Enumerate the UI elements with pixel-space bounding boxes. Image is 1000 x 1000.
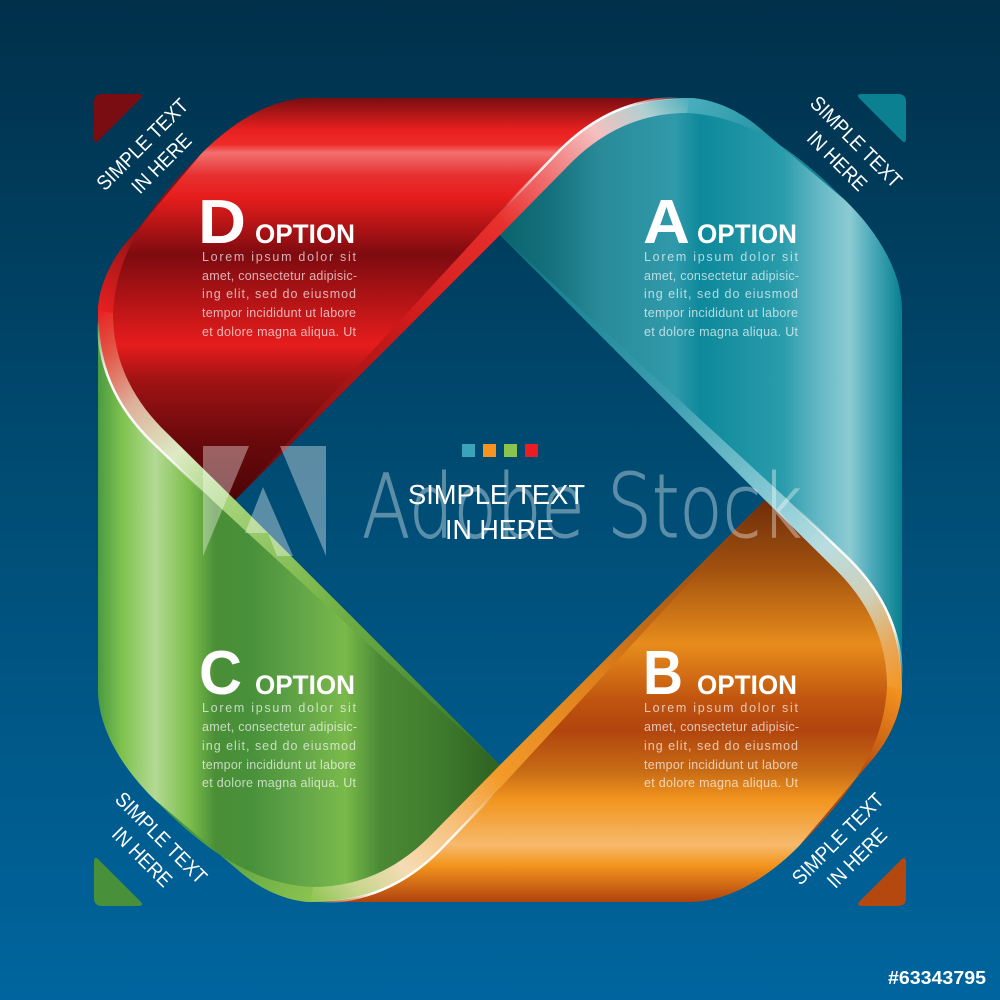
watermark: logo (203, 446, 326, 556)
ribbon: option C green (98, 310, 500, 902)
corner icon: orange triangle (858, 858, 906, 906)
text block: option C: OPTION (255, 670, 355, 700)
text block: option D (198, 188, 357, 339)
text block: option B: ing elit, sed do eiusmod (644, 739, 798, 753)
corner icon: teal triangle (858, 94, 906, 142)
text block: option C: ing elit, sed do eiusmod (202, 739, 356, 753)
text block: option A: A (643, 188, 690, 257)
ribbon: option A teal (500, 98, 902, 690)
outer edge highlights (98, 98, 902, 902)
corner label: top left: IN HERE (127, 129, 196, 198)
glass fold band: green over red (98, 310, 500, 765)
glass fold band: teal over orange (500, 235, 902, 690)
text block: option A: Lorem ipsum dolor sit (644, 250, 799, 264)
corner icon: green triangle (94, 858, 142, 906)
text block: option B: tempor incididunt ut labore (644, 758, 798, 772)
text block: option C: et dolore magna aliqua. Ut (202, 776, 357, 790)
glass fold band: orange over green (310, 500, 765, 902)
text block: option D: D (198, 188, 246, 257)
text block: option D: ing elit, sed do eiusmod (202, 287, 356, 301)
text block: option A: ing elit, sed do eiusmod (644, 287, 798, 301)
text block: option B (643, 639, 799, 790)
text block: option D: tempor incididunt ut labore (202, 306, 356, 320)
corner label: bottom right: IN HERE (823, 824, 892, 893)
text block: option A: amet, consectetur adipisic- (644, 269, 799, 283)
text block: option D: Lorem ipsum dolor sit (202, 250, 357, 264)
text block: option B: B (643, 639, 683, 708)
corner label: bottom left: IN HERE (107, 823, 176, 892)
text block: option C: tempor incididunt ut labore (202, 758, 356, 772)
text block: option D: et dolore magna aliqua. Ut (202, 325, 357, 339)
text block: option B: OPTION (697, 670, 797, 700)
corner label: top right: IN HERE (802, 127, 871, 196)
centre heading (408, 479, 585, 545)
text block: option C (199, 639, 357, 790)
text block: option C: Lorem ipsum dolor sit (202, 701, 357, 715)
stock id: #63343795 (888, 968, 986, 988)
text block: option D: OPTION (255, 219, 355, 249)
text block: option A (643, 188, 799, 339)
corner icon: red triangle (94, 94, 142, 142)
text block: option C: amet, consectetur adipisic- (202, 720, 357, 734)
centre heading: IN HERE (445, 514, 554, 545)
text block: option B: Lorem ipsum dolor sit (644, 701, 799, 715)
centre heading: SIMPLE TEXT (408, 479, 585, 510)
text block: option A: tempor incididunt ut labore (644, 306, 798, 320)
text block: option B: amet, consectetur adipisic- (644, 720, 799, 734)
corner label: top right: SIMPLE TEXT (805, 92, 907, 193)
corner label: bottom right: SIMPLE TEXT (788, 788, 889, 890)
text block: option A: et dolore magna aliqua. Ut (644, 325, 799, 339)
glass fold band: red over teal (235, 98, 690, 500)
text block: option B: et dolore magna aliqua. Ut (644, 776, 799, 790)
ribbon: option D red (98, 98, 690, 500)
text block: option A: OPTION (697, 219, 797, 249)
text block: option C: C (199, 639, 242, 708)
text block: option D: amet, consectetur adipisic- (202, 269, 357, 283)
corner label: bottom left: SIMPLE TEXT (110, 788, 212, 889)
legend: colour squares (462, 444, 538, 457)
ribbon: option B orange (310, 500, 902, 902)
watermark: Adobe Stock: Adobe Stock (362, 455, 802, 558)
corner label: top left: SIMPLE TEXT (92, 94, 194, 195)
